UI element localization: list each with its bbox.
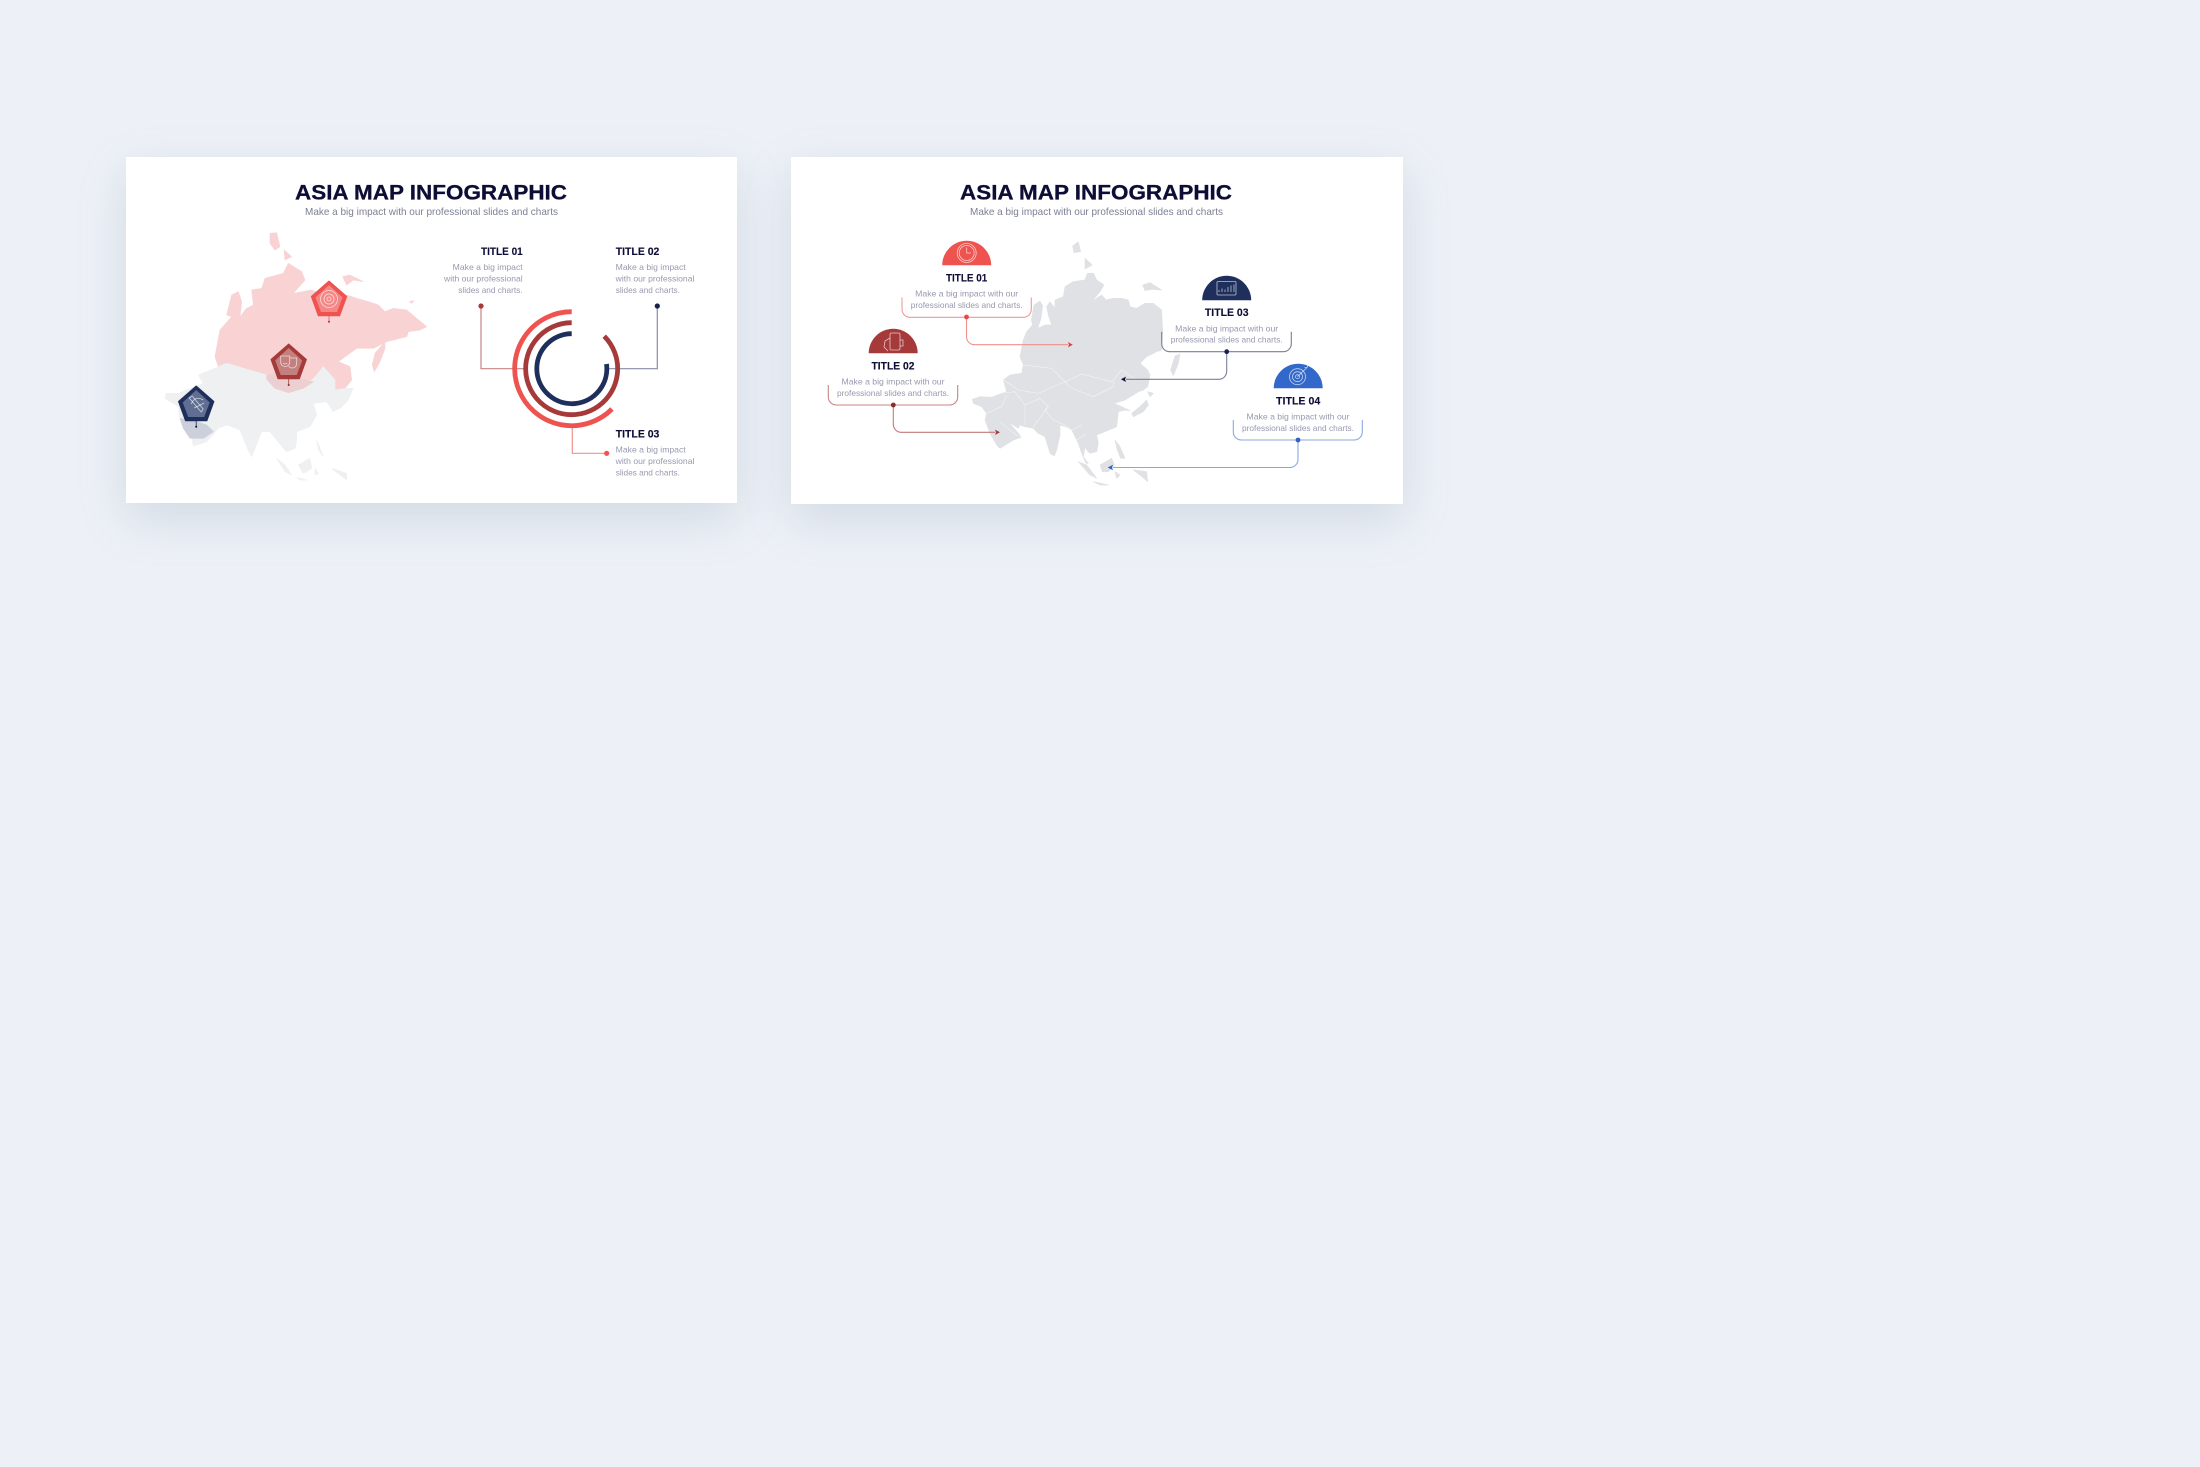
text block: title 02: with our professional bbox=[615, 274, 695, 284]
callout: title 02 bbox=[828, 329, 1000, 435]
title: ASIA MAP INFOGRAPHIC bbox=[295, 180, 567, 204]
title: ASIA MAP INFOGRAPHIC bbox=[960, 180, 1232, 204]
text block: title 02: TITLE 02 bbox=[616, 246, 659, 258]
map of Asia bbox=[972, 242, 1180, 485]
text block: title 03: with our professional bbox=[615, 456, 695, 466]
map region: Mongolia highlighted bbox=[267, 373, 313, 393]
callout: title 02: TITLE 02 bbox=[872, 360, 914, 372]
text block: title 01: slides and charts. bbox=[458, 285, 523, 295]
connector: title 01 to rings bbox=[481, 306, 524, 369]
text block: title 02: slides and charts. bbox=[616, 285, 680, 295]
callout: title 01: professional slides and charts. bbox=[911, 300, 1023, 310]
text block: title 02: Make a big impact bbox=[616, 262, 686, 272]
callout: title 03 bbox=[1121, 276, 1291, 382]
icon dome: chart bbox=[1202, 276, 1251, 300]
callout: title 04: professional slides and charts. bbox=[1242, 423, 1354, 433]
text block: title 03: slides and charts. bbox=[616, 467, 680, 477]
text block: title 03: Make a big impact bbox=[616, 444, 686, 454]
subtitle: Make a big impact with our professional slides and charts bbox=[305, 206, 558, 218]
callout: title 01 bbox=[902, 241, 1073, 347]
connector: title 03 to rings bbox=[572, 428, 606, 453]
text block: title 03 bbox=[615, 428, 695, 477]
callout: title 02: Make a big impact with our bbox=[842, 376, 945, 386]
dot: title 02 bbox=[655, 303, 660, 309]
text block: title 02 bbox=[615, 246, 695, 295]
callout: title 01: Make a big impact with our bbox=[915, 289, 1018, 299]
marker: red pentagon bbox=[311, 281, 347, 323]
map region: rest of Asia bbox=[165, 363, 353, 480]
dot: title 01 bbox=[478, 303, 484, 309]
text block: title 01: with our professional bbox=[443, 274, 523, 284]
callout: title 04: TITLE 04 bbox=[1276, 395, 1321, 407]
ring: inner navy bbox=[537, 334, 607, 404]
icon: network globe bbox=[320, 290, 338, 308]
callout: title 01: TITLE 01 bbox=[946, 273, 987, 285]
callout: title 03: professional slides and charts. bbox=[1171, 335, 1283, 345]
dot: title 03 bbox=[604, 451, 609, 456]
map region: Russia bbox=[215, 233, 427, 390]
icon dome: clock bbox=[942, 241, 991, 265]
marker: dark red pentagon bbox=[271, 344, 306, 386]
icon: theatre masks bbox=[281, 356, 297, 368]
text block: title 01: TITLE 01 bbox=[481, 246, 523, 258]
text block: title 01: Make a big impact bbox=[453, 262, 523, 272]
callout: title 03: Make a big impact with our bbox=[1175, 323, 1278, 333]
icon dome: target bbox=[1274, 364, 1323, 388]
map region: Saudi Arabia highlighted bbox=[180, 418, 213, 438]
subtitle: Make a big impact with our professional slides and charts bbox=[970, 206, 1223, 218]
ring: middle dark red bbox=[526, 323, 618, 415]
map of Asia with highlighted regions bbox=[165, 233, 427, 480]
icon: art tools bbox=[189, 396, 204, 412]
panel: right slide, map with callouts bbox=[791, 157, 1403, 504]
marker: navy pentagon bbox=[178, 386, 214, 428]
panel: left slide, map with pentagon markers and ring chart bbox=[126, 157, 737, 503]
text block: title 01 bbox=[443, 246, 523, 295]
connector: title 02 to rings bbox=[606, 306, 657, 369]
text block: title 03: TITLE 03 bbox=[616, 428, 659, 440]
callout: title 04 bbox=[1108, 364, 1362, 470]
callout: title 02: professional slides and charts. bbox=[837, 388, 949, 398]
ring: outer red bbox=[515, 312, 612, 426]
icon dome: hand with phone bbox=[869, 329, 918, 353]
ring chart bbox=[515, 312, 618, 426]
callout: title 03: TITLE 03 bbox=[1205, 307, 1249, 319]
callout: title 04: Make a big impact with our bbox=[1246, 412, 1350, 422]
